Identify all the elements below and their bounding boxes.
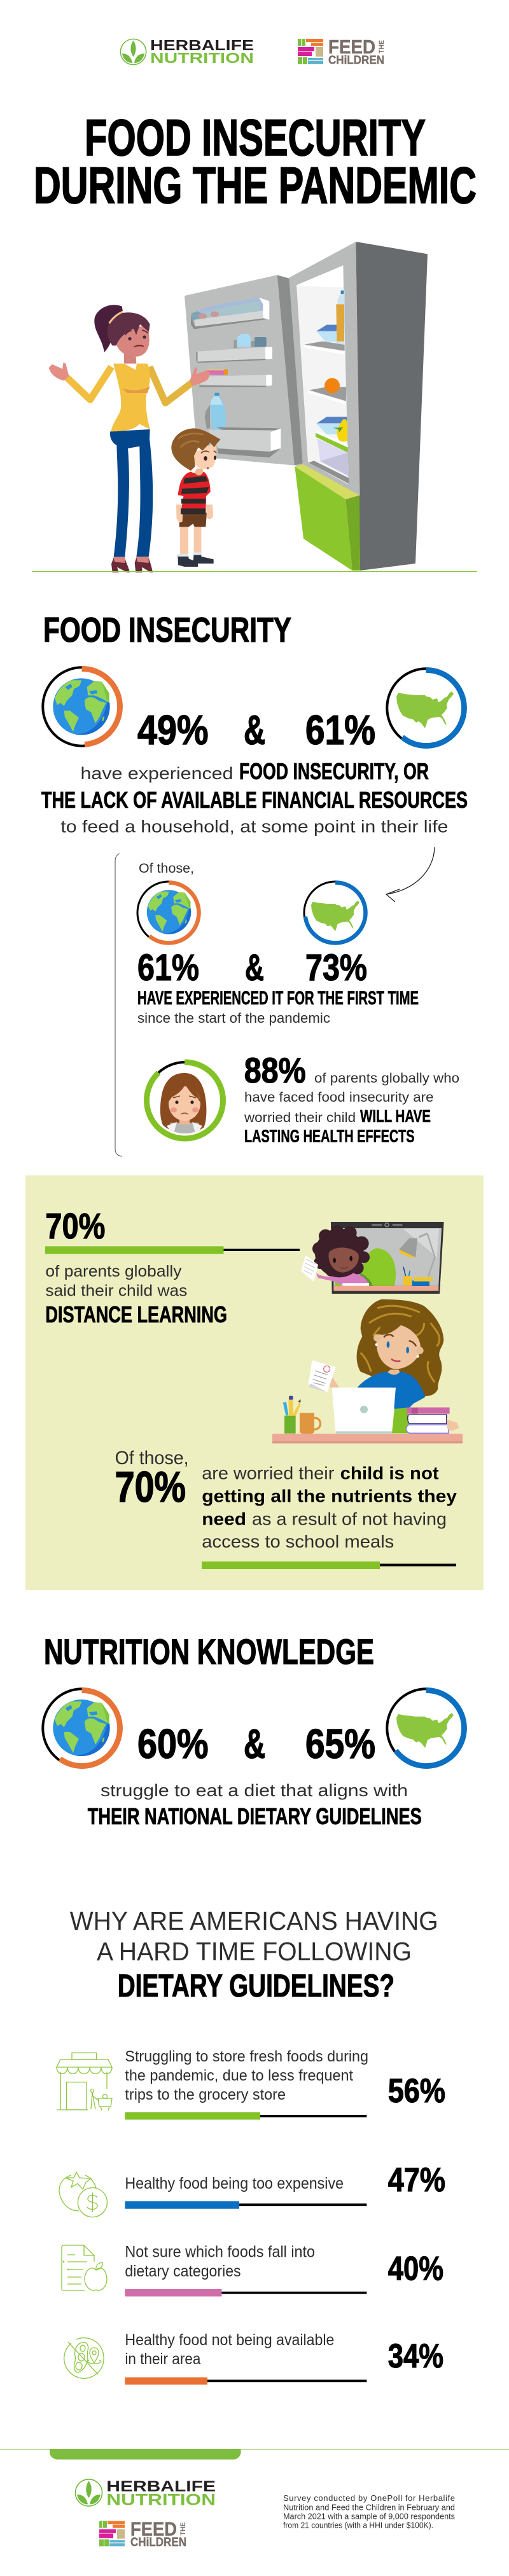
global ring 61%	[137, 882, 200, 944]
distance learning text	[45, 1263, 227, 1327]
footer logo: Feed the Children	[99, 2517, 187, 2549]
bar 34%	[125, 2378, 366, 2385]
section: food insecurity	[41, 610, 468, 1156]
ampersand: &	[244, 707, 265, 753]
description: have experienced	[80, 764, 233, 783]
stat 88: LASTING HEALTH EFFECTS	[244, 1126, 415, 1146]
logo: Herbalife Nutrition: NUTRITION	[150, 50, 254, 66]
logo: Feed the Children	[298, 36, 386, 66]
of those stat	[115, 1448, 189, 1511]
global ring 49%	[43, 667, 122, 746]
title	[34, 109, 477, 214]
bar 40%	[125, 2289, 366, 2296]
global ring 60%	[43, 1689, 122, 1768]
logo: Feed the Children: THE	[378, 40, 386, 53]
bar 56%	[125, 2112, 366, 2119]
school meals text: as a result of not having	[252, 1509, 447, 1528]
stat 88: of parents globally who	[314, 1071, 459, 1086]
ampersand: &	[245, 947, 264, 988]
stat 49%: 49%	[137, 707, 209, 753]
school meals text: getting all the nutrients they	[202, 1486, 457, 1506]
section heading: why are Americans	[70, 1906, 438, 2004]
bracket	[115, 854, 122, 1156]
first time text: since the start of the pandemic	[137, 1010, 330, 1026]
survey note: Survey conducted by OnePoll for Herbalife	[283, 2493, 455, 2503]
school meals text: are worried their	[202, 1463, 334, 1483]
description	[41, 758, 468, 836]
bar 47%	[125, 2201, 366, 2209]
boy	[171, 428, 221, 567]
survey note: from 21 countries (with a HHI under $100K).	[283, 2520, 433, 2530]
distance learning text: of parents globally	[45, 1263, 182, 1280]
hero illustration	[32, 242, 477, 572]
reason text: Not sure which foods fall into	[125, 2243, 315, 2261]
reason row: too expensive	[59, 2161, 445, 2217]
reason row: not available	[64, 2331, 443, 2385]
section heading: why are Americans: DIETARY GUIDELINES?	[118, 1968, 394, 2004]
stat 88: have faced food insecurity are	[244, 1090, 434, 1105]
stat 61%: 61%	[137, 947, 199, 988]
heading: NUTRITION KNOWLEDGE	[44, 1631, 374, 1672]
heading: FOOD INSECURITY	[43, 610, 291, 649]
first time text	[137, 988, 419, 1026]
illustration: parent at laptop	[272, 1299, 463, 1443]
survey note	[283, 2493, 455, 2530]
ampersand: &	[244, 1721, 265, 1767]
stat 34%: 34%	[388, 2337, 443, 2375]
stat 73%: 73%	[305, 947, 367, 988]
ground line	[32, 571, 477, 572]
reason text: Healthy food being too expensive	[125, 2175, 344, 2192]
icon: worried child ring	[146, 1062, 223, 1139]
USA ring 73%	[304, 882, 366, 944]
description: to feed a household, at some point in their life	[60, 817, 448, 836]
section: nutrition knowledge	[43, 1631, 466, 1829]
footer logo: Feed the Children: THE	[179, 2522, 187, 2535]
icon: bean and location	[64, 2338, 104, 2378]
footer logo: Feed the Children: CHiLDREN	[130, 2536, 186, 2549]
reason text: in their area	[125, 2350, 200, 2368]
description: struggle to eat a diet that aligns with	[101, 1781, 408, 1800]
stat 88: worried their child	[244, 1111, 356, 1125]
distance learning text: said their child was	[45, 1282, 187, 1300]
school meals text: access to school meals	[202, 1532, 394, 1551]
logo: Herbalife Nutrition: HERBALIFE	[150, 37, 254, 53]
footer logo: Herbalife Nutrition: NUTRITION	[106, 2491, 216, 2509]
school meals text: need	[202, 1509, 246, 1528]
stat 88: WILL HAVE	[360, 1106, 431, 1126]
fridge	[185, 242, 428, 571]
stat 61%: 61%	[305, 707, 375, 753]
stat 65%: 65%	[305, 1721, 375, 1767]
reason row: food categories	[62, 2243, 443, 2296]
USA ring 65%	[387, 1689, 466, 1768]
logo: Herbalife Nutrition	[120, 37, 254, 66]
of those stat: Of those,	[115, 1448, 189, 1469]
reason text: the pandemic, due to less frequent	[125, 2067, 353, 2084]
of those: Of those,	[139, 861, 194, 876]
stat 60%: 60%	[137, 1721, 209, 1767]
stat 47%: 47%	[388, 2161, 445, 2199]
footer logo: Feed the Children: FEED	[130, 2517, 177, 2540]
footer logo: Herbalife Nutrition: HERBALIFE	[106, 2478, 216, 2495]
bar 70 school meals	[202, 1562, 456, 1569]
stat 40%: 40%	[388, 2250, 443, 2288]
survey note: March 2021 with a sample of 9,000 respondents	[283, 2511, 455, 2521]
bar 70	[45, 1246, 300, 1254]
logo: Feed the Children: FEED	[328, 36, 375, 58]
reason text	[125, 2243, 315, 2280]
stat 56%: 56%	[388, 2072, 445, 2110]
description	[88, 1781, 422, 1829]
reason row: storing fresh foods	[57, 2048, 445, 2119]
reason text	[125, 2048, 368, 2103]
logo: Feed the Children: CHiLDREN	[328, 53, 384, 66]
school meals text	[202, 1463, 457, 1551]
reason text: Struggling to store fresh foods during	[125, 2048, 368, 2065]
reason text: dietary categories	[125, 2262, 241, 2280]
icon: store	[57, 2053, 112, 2110]
footer line and tab	[0, 2449, 509, 2460]
survey note: Nutrition and Feed the Children in February and	[283, 2503, 455, 2512]
icon: document and apple	[62, 2245, 107, 2290]
of those stat: 70%	[115, 1463, 186, 1511]
icon: tomato and coin	[59, 2172, 107, 2217]
section heading: why are Americans: WHY ARE AMERICANS HAVING	[70, 1906, 438, 1935]
reason text	[125, 2331, 334, 2368]
stat 88: 88%	[244, 1050, 306, 1090]
footer	[0, 2449, 509, 2549]
reason text: Healthy food not being available	[125, 2331, 334, 2349]
stat 70: 70%	[45, 1206, 105, 1247]
footer logo: Herbalife Nutrition	[75, 2478, 216, 2509]
reason text: trips to the grocery store	[125, 2086, 286, 2103]
header logos	[120, 36, 386, 66]
section heading: why are Americans: A HARD TIME FOLLOWING	[97, 1937, 412, 1966]
panel: distance learning	[25, 1175, 484, 1590]
arrow	[386, 847, 435, 902]
USA ring 61%	[387, 668, 466, 747]
school meals text: child is not	[340, 1463, 439, 1483]
woman	[49, 305, 211, 572]
description: FOOD INSECURITY, OR	[239, 758, 429, 784]
illustration: child on video screen	[301, 1222, 444, 1294]
distance learning text: DISTANCE LEARNING	[45, 1301, 227, 1327]
stat 88	[244, 1050, 459, 1146]
